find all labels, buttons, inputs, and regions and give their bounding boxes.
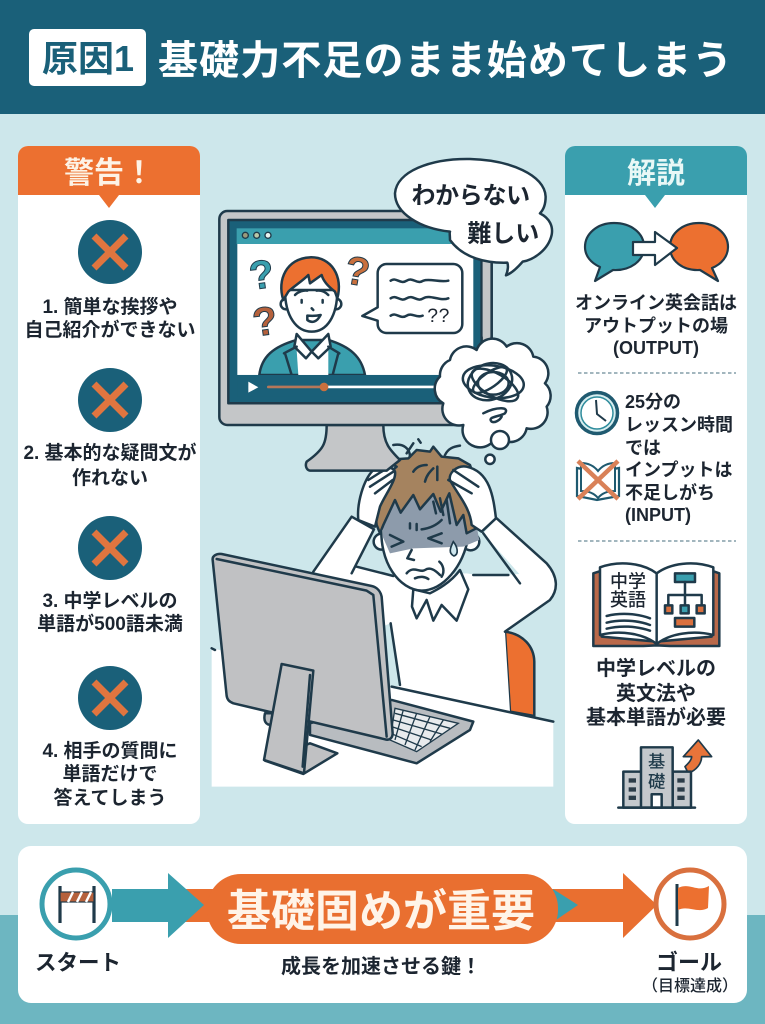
icon: crossed out book <box>577 461 619 500</box>
icon: output speech bubbles <box>585 223 728 281</box>
confused question marks: ? <box>247 252 277 299</box>
lesson time text <box>625 392 733 525</box>
illustration: online lesson monitor <box>219 159 552 471</box>
confused question marks <box>247 248 373 345</box>
stand <box>306 425 400 471</box>
speech bubble: confusion: わからない <box>412 182 530 209</box>
confused question marks: ? <box>341 248 373 296</box>
monitor frame <box>219 211 492 425</box>
icon: x mark 2 <box>78 368 142 432</box>
icon: x mark 3 <box>78 516 142 580</box>
icon: open textbook: 中学 <box>610 571 646 591</box>
explanation heading: 解説 <box>627 157 685 190</box>
confused question marks: ? <box>250 298 280 345</box>
pill: foundation matters: 基礎固めが重要 <box>227 887 535 936</box>
warning item 4: 4. 相手の質問に <box>42 740 178 762</box>
speech bubble: confusion: 難しい <box>467 221 539 248</box>
panel: warning <box>18 146 200 824</box>
head <box>374 495 479 591</box>
desk surface <box>212 648 553 787</box>
speech bubble: confusion <box>395 159 552 275</box>
icon: foundation building with arrow <box>618 740 712 808</box>
teacher speech bubble: ?? <box>427 306 450 327</box>
textbook caption: 基本単語が必要 <box>586 705 726 729</box>
teacher speech bubble <box>362 264 462 333</box>
caption: key to growth: 成長を加速させる鍵！ <box>281 954 481 978</box>
label: goal: ゴール <box>656 950 722 975</box>
icon: open textbook: 英語 <box>610 590 646 610</box>
arrow: start to key <box>112 873 204 938</box>
warning item 3 <box>37 589 183 635</box>
label: start: スタート <box>35 951 121 975</box>
arrow: key to goal <box>170 873 657 938</box>
hair <box>376 447 480 533</box>
output text <box>575 292 737 358</box>
icon: foundation building with arrow: 礎 <box>648 771 665 791</box>
pill: foundation matters <box>207 874 558 944</box>
warning item 4 <box>42 740 178 809</box>
header banner <box>0 0 765 114</box>
video control bar <box>237 375 473 397</box>
textbook caption <box>586 657 726 729</box>
output text: アウトプットの場 <box>584 316 728 336</box>
badge: cause 1 <box>29 29 146 86</box>
output text: オンライン英会話は <box>575 292 737 313</box>
keyboard <box>310 700 473 763</box>
desk edge <box>392 687 553 722</box>
lesson time text: 25分の <box>625 392 681 412</box>
warning item 1 <box>24 295 196 341</box>
icon: clock <box>576 392 618 434</box>
foreground monitor <box>212 554 393 774</box>
icon: goal flag <box>656 870 724 938</box>
thought bubble: tangled scribble <box>435 339 551 464</box>
label: goal: （目標達成） <box>642 977 738 995</box>
icon: foundation building with arrow: 基 <box>648 751 665 771</box>
icon: x mark 4 <box>78 666 142 730</box>
lesson time text: レッスン時間 <box>625 415 733 435</box>
warning item 2: 2. 基本的な疑問文が <box>23 441 197 464</box>
shirt and arms <box>313 517 556 712</box>
warning item 2: 作れない <box>72 467 148 489</box>
warning item 3: 単語が500語未満 <box>37 612 183 635</box>
warning item 1: 1. 簡単な挨拶や <box>42 295 178 318</box>
illustration: desk and frustrated learner <box>212 439 556 787</box>
warning item 3: 3. 中学レベルの <box>42 589 178 612</box>
icon: x mark 1 <box>78 220 142 284</box>
teacher <box>259 257 365 375</box>
panel: explanation <box>565 146 747 824</box>
icon: start barrier <box>42 870 110 938</box>
label: goal <box>642 950 738 995</box>
textbook caption: 中学レベルの <box>596 657 716 680</box>
lesson time text: 不足しがち <box>625 482 715 503</box>
warning item 1: 自己紹介ができない <box>24 318 196 341</box>
lesson time text: (INPUT) <box>625 505 691 525</box>
chair back <box>505 632 534 716</box>
output text: (OUTPUT) <box>613 338 699 358</box>
textbook caption: 英文法や <box>616 682 696 705</box>
warning item 2 <box>23 441 197 489</box>
warning item 4: 単語だけで <box>62 763 158 785</box>
warning heading: 警告！ <box>64 157 154 190</box>
collar <box>412 570 468 621</box>
warning heading <box>18 146 200 208</box>
lesson time text: では <box>625 438 661 458</box>
lesson time text: インプットは <box>625 460 732 480</box>
window title bar <box>237 228 473 244</box>
panel: roadmap <box>18 846 747 1003</box>
warning item 4: 答えてしまう <box>53 786 167 809</box>
hands <box>358 466 496 532</box>
badge: cause 1: 原因1 <box>42 38 134 79</box>
title: 基礎力不足のまま始めてしまう <box>158 39 733 83</box>
explanation heading <box>565 146 747 208</box>
icon: open textbook <box>593 563 719 646</box>
